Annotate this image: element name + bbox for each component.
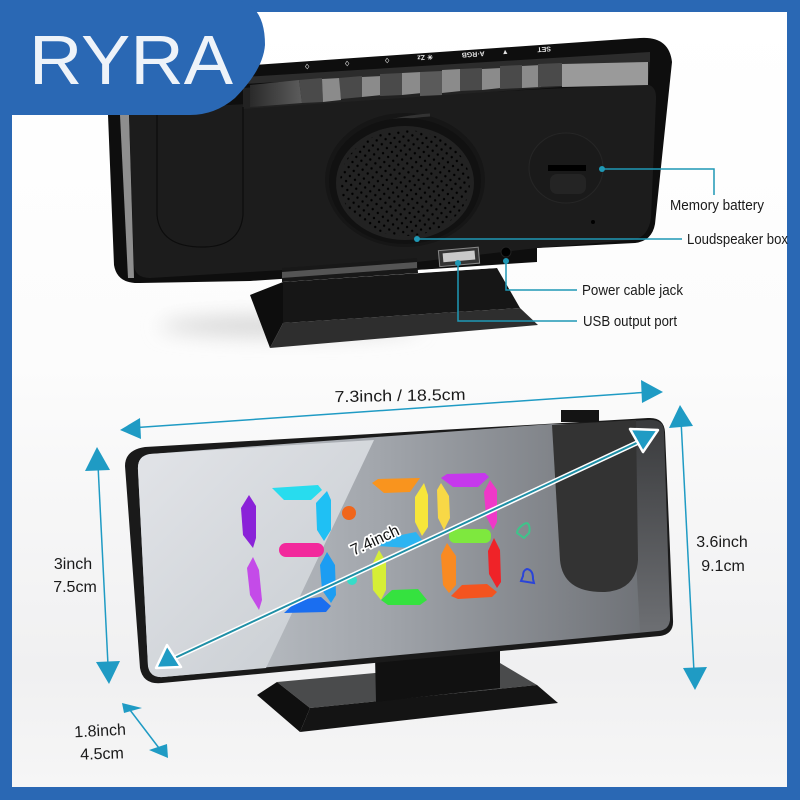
diagonal label: 7.4inch [348,522,402,560]
USB port [438,247,480,267]
depth arrow with label: 4.5cm [80,745,124,764]
depth arrow with label [74,703,168,764]
clock bezel [125,418,673,683]
height arrow right with label: 3.6inch [696,534,748,551]
top button labels: ♢ [344,59,351,67]
height arrow left with label: 3inch [54,556,92,573]
white gap under jack housing [417,266,497,273]
back stand neck [282,258,418,282]
callout: power cable jack [503,258,684,299]
height arrow right with label [669,405,748,690]
height arrow left with label [53,447,120,684]
rainbow digit 3 [272,485,336,613]
top button labels: SET [536,45,551,53]
back stand base [250,268,538,348]
callout: loudspeaker box: Loudspeaker box [687,232,789,248]
rainbow digit 8 [437,473,501,599]
logo badge [0,0,265,115]
battery cover [529,133,603,224]
callout: USB output port: USB output port [583,314,677,330]
top button strip [243,52,650,109]
back view clock [108,38,672,348]
bell icon [521,569,534,583]
mirror reflection [138,440,374,677]
left pill recess [157,107,243,247]
projector panel [552,410,670,632]
back clock body [108,38,672,283]
top button labels: ♢ [384,56,391,64]
height arrow left with label: 7.5cm [53,579,97,596]
width arrow with label [120,380,663,439]
rainbow digit 1 [241,495,262,610]
callout: memory battery [599,166,765,214]
callout: memory battery: Memory battery [670,198,765,214]
callout: USB output port [455,260,677,330]
rear panel [129,84,656,278]
height arrow right with label: 9.1cm [701,558,745,575]
heart icon [517,523,529,538]
diagonal arrow with label [156,429,658,668]
power jack [501,247,511,257]
top button labels: A·RGB [461,49,485,58]
width arrow with label: 7.3inch / 18.5cm [334,387,466,406]
top button labels: ♢ [304,62,311,70]
depth arrow with label: 1.8inch [74,722,126,741]
top button labels: ▼ [501,48,509,55]
top button labels: ☀ Zz [416,52,433,62]
logo text: RYRA [29,21,233,99]
callout: loudspeaker box [414,232,789,248]
callout: power cable jack: Power cable jack [582,283,684,299]
top button labels [304,45,551,70]
rainbow digit 2 [372,478,428,605]
speaker [325,113,485,247]
mirror screen [138,424,670,677]
front view clock [125,410,673,732]
front stand [257,645,558,732]
left rim highlight [120,115,134,278]
colon dots [342,506,357,585]
